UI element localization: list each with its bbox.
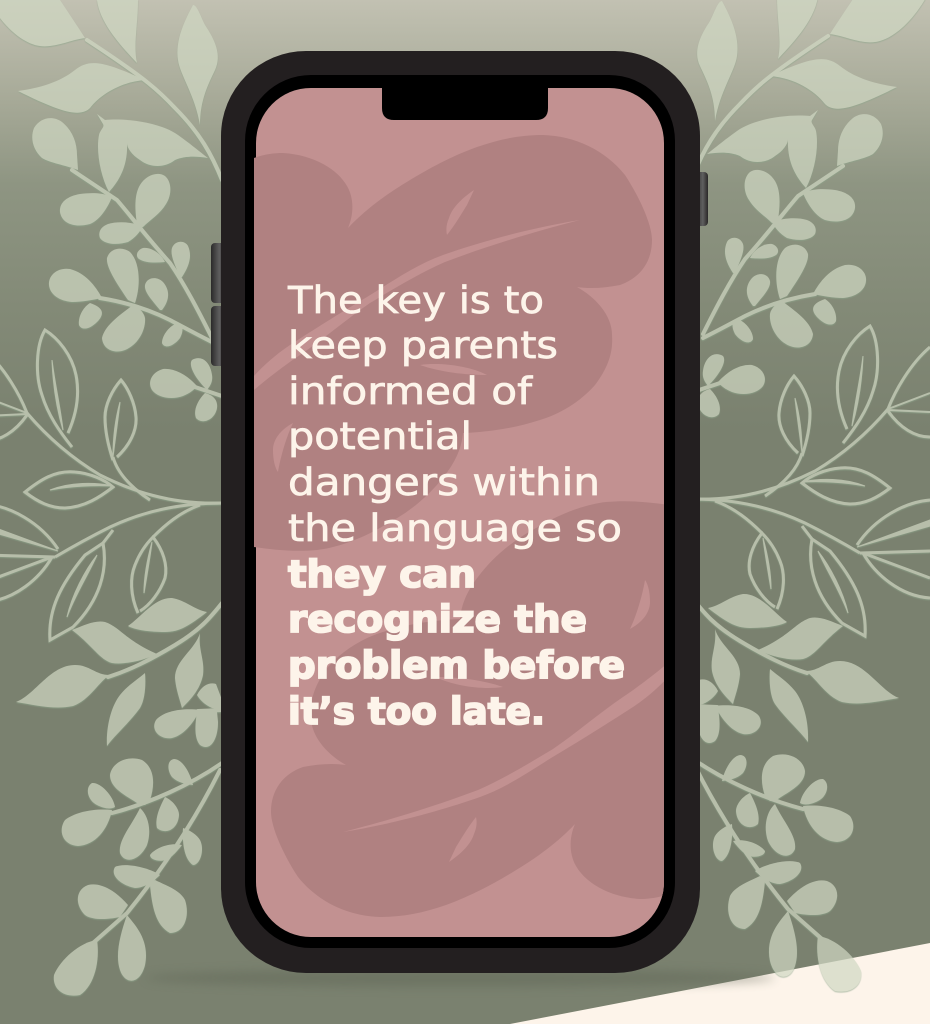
phone body [221, 51, 700, 973]
quote text: potential [288, 415, 472, 458]
quote text: informed of [288, 370, 533, 413]
side button: right [695, 172, 708, 226]
left foliage [0, 0, 222, 996]
side button: lower left [211, 306, 225, 366]
phone ground shadow [145, 969, 775, 987]
side button: upper left [211, 243, 225, 303]
quote text: recognize the [288, 598, 587, 641]
screen [256, 88, 664, 937]
cream corner wedge [510, 943, 930, 1024]
notch [382, 86, 548, 120]
black bezel [245, 75, 675, 948]
quote text [287, 279, 625, 733]
phone [211, 51, 708, 973]
quote text: keep parents [288, 324, 558, 367]
quote text: dangers within [288, 461, 600, 504]
quote text: they can [288, 553, 476, 596]
quote text: The key is to [287, 279, 544, 322]
right foliage [693, 0, 930, 992]
quote text: problem before [288, 644, 625, 687]
screen leaf: lower [271, 501, 669, 917]
quote text: it’s too late. [288, 690, 545, 733]
quote text: the language so [288, 507, 622, 550]
screen leaf: upper [254, 135, 652, 551]
